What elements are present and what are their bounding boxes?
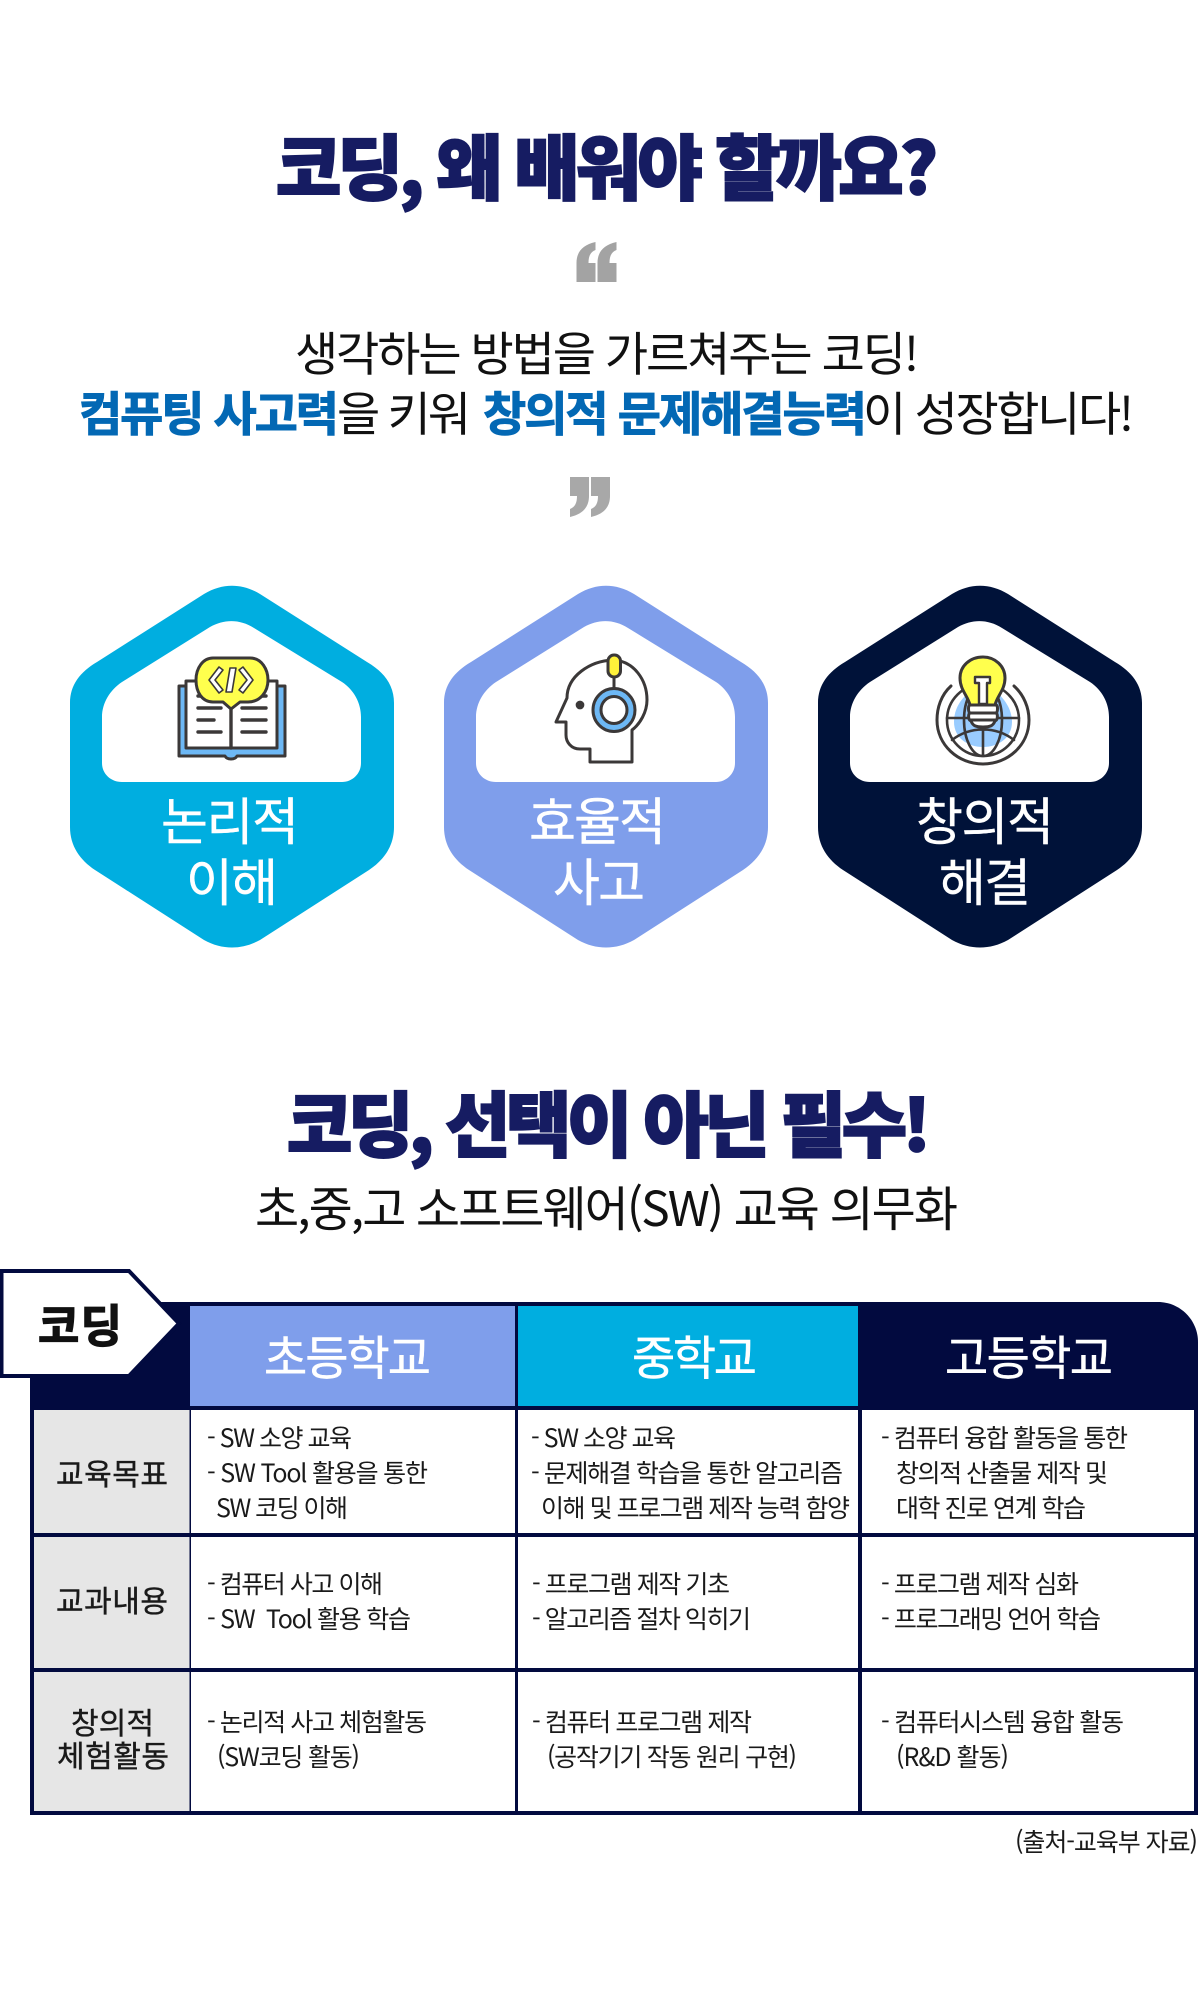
cell: middle content: - 프로그램 제작 기초 xyxy=(532,1565,730,1601)
label: efficient thinking: 사고 xyxy=(553,842,645,916)
icon: head with headset xyxy=(556,655,647,762)
row label: curriculum content: 교과내용 xyxy=(56,1577,168,1621)
cell: elementary content xyxy=(207,1565,411,1636)
tab: coding label: 코딩 xyxy=(38,1290,122,1355)
header: middle school xyxy=(518,1306,858,1406)
cell: high content: - 프로그램 제작 심화 xyxy=(881,1565,1079,1601)
header: elementary xyxy=(190,1306,515,1406)
cell: middle activities: - 컴퓨터 프로그램 제작 xyxy=(532,1703,752,1739)
label: logical understanding xyxy=(161,781,299,916)
cell: high activities: (R&D 활동) xyxy=(896,1738,1009,1774)
cell: middle goals: - SW 소양 교육 xyxy=(531,1419,676,1455)
cell: middle goals: - 문제해결 학습을 통한 알고리즘 xyxy=(531,1454,843,1490)
cell: middle activities: (공작기기 작동 원리 구현) xyxy=(547,1738,797,1774)
cell: middle goals xyxy=(531,1419,850,1525)
subheading: mandatory software education: 초,중,고 소프트웨어(SW) 교육 의무화 xyxy=(255,1170,958,1240)
heading: coding is essential: 코딩, 선택이 아닌 필수! xyxy=(287,1070,931,1172)
cell: high activities xyxy=(881,1703,1124,1774)
lead text: quote: 을 키워 xyxy=(337,376,471,445)
panel: creative solving hexagon xyxy=(818,586,1142,948)
cell: elementary activities xyxy=(207,1703,427,1774)
table frame xyxy=(30,1302,1198,1815)
lead text: quote: 이 성장합니다! xyxy=(863,376,1134,445)
label: efficient thinking xyxy=(529,781,666,916)
lead text: quote: 컴퓨팅 사고력 xyxy=(79,376,339,445)
title: why learn coding: 코딩, 왜 배워야 할까요? xyxy=(276,113,938,215)
cell: middle activities xyxy=(532,1703,797,1774)
cell: elementary goals xyxy=(207,1419,428,1525)
cell: high content: - 프로그래밍 언어 학습 xyxy=(881,1600,1101,1636)
header: middle school: 중학교 xyxy=(632,1320,757,1389)
cell: elementary goals: - SW 소양 교육 xyxy=(207,1419,352,1455)
cell: middle content: - 알고리즘 절차 익히기 xyxy=(532,1600,751,1636)
cell: high goals: 대학 진로 연계 학습 xyxy=(896,1489,1086,1525)
cell: middle goals: 이해 및 프로그램 제작 능력 함양 xyxy=(541,1489,850,1525)
table: school level curriculum xyxy=(30,1302,1198,1815)
cell: elementary activities: - 논리적 사고 체험활동 xyxy=(207,1703,427,1739)
header: elementary: 초등학교 xyxy=(264,1320,431,1389)
cell: high goals xyxy=(881,1419,1128,1525)
lead text: quote xyxy=(79,316,1134,445)
cell: elementary goals: - SW Tool 활용을 통한 xyxy=(207,1454,428,1490)
cell: high goals: 창의적 산출물 제작 및 xyxy=(896,1454,1108,1490)
label: logical understanding: 이해 xyxy=(186,842,278,916)
icon: closing quotation mark xyxy=(570,477,610,517)
label: creative solving xyxy=(916,781,1054,916)
cell: high goals: - 컴퓨터 융합 활동을 통한 xyxy=(881,1419,1128,1455)
icon: opening quotation mark xyxy=(576,242,616,282)
cell: elementary content: - 컴퓨터 사고 이해 xyxy=(207,1565,383,1601)
lead text: quote: 창의적 문제해결능력 xyxy=(483,376,867,445)
lead text: quote: 생각하는 방법을 가르쳐주는 코딩! xyxy=(295,316,919,385)
label: efficient thinking: 효율적 xyxy=(529,781,666,855)
cell: elementary content: - SW Tool 활용 학습 xyxy=(207,1600,411,1636)
label: creative solving: 창의적 xyxy=(916,781,1054,855)
label: creative solving: 해결 xyxy=(939,842,1031,916)
cell: high content xyxy=(881,1565,1101,1636)
label: logical understanding: 논리적 xyxy=(161,781,299,855)
row label: education goals: 교육목표 xyxy=(56,1450,168,1494)
header: high school: 고등학교 xyxy=(945,1320,1113,1389)
row label: creative activities: 체험활동 xyxy=(57,1732,169,1776)
icon: light bulb over globe xyxy=(937,657,1029,764)
panel: logical understanding hexagon xyxy=(70,586,394,948)
cell: elementary goals: SW 코딩 이해 xyxy=(216,1489,348,1525)
cell: high activities: - 컴퓨터시스템 융합 활동 xyxy=(881,1703,1124,1739)
icon: open book with code bubble xyxy=(179,658,285,759)
panel: efficient thinking hexagon xyxy=(444,586,768,948)
tab: coding label xyxy=(2,1271,179,1376)
cell: middle content xyxy=(532,1565,751,1636)
row label: creative activities xyxy=(57,1699,169,1776)
row label: creative activities: 창의적 xyxy=(71,1699,154,1743)
cell: elementary activities: (SW코딩 활동) xyxy=(217,1738,360,1774)
source note: (출처-교육부 자료) xyxy=(1015,1823,1198,1859)
